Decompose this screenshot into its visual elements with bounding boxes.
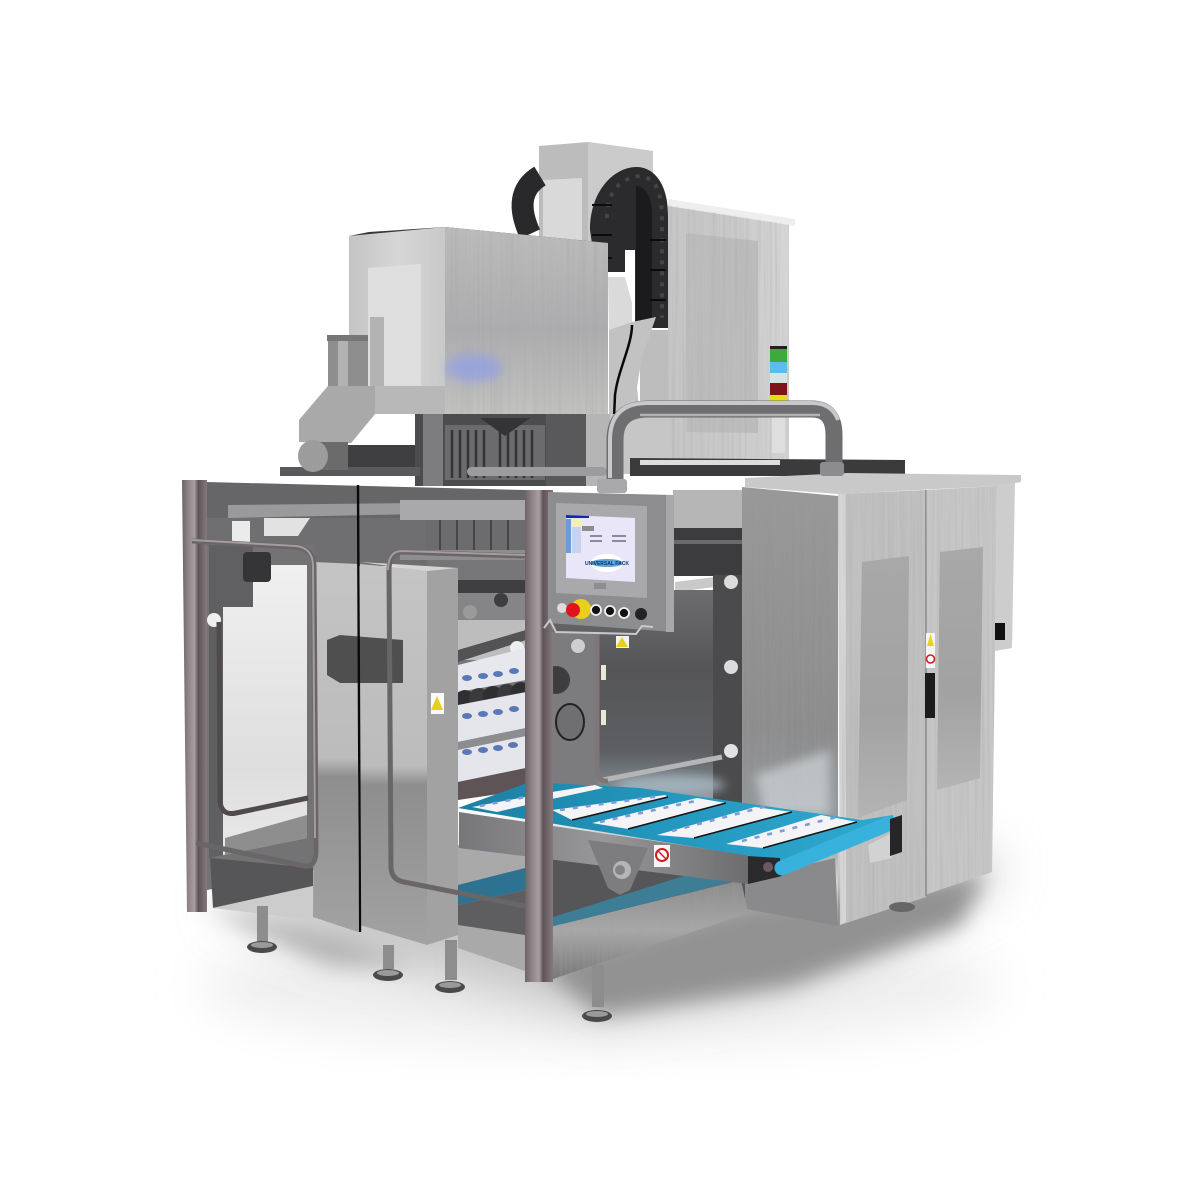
end roller <box>748 824 888 884</box>
maker badge <box>594 583 606 589</box>
right cabinet <box>838 486 1005 925</box>
gusset plate <box>588 840 648 895</box>
cabinet window 2 <box>937 547 983 790</box>
left glass door panel <box>207 545 315 890</box>
foot left <box>247 906 277 953</box>
bolt 3 <box>724 744 738 758</box>
cabinet window 1 <box>858 556 909 818</box>
belt <box>458 782 895 875</box>
lower left panel <box>210 858 313 920</box>
control panel <box>544 492 674 634</box>
under hopper dosing section <box>415 414 670 486</box>
panel warning sign <box>616 636 629 648</box>
horizontal rod <box>467 467 607 476</box>
conveyor frame <box>459 812 748 884</box>
side panel <box>742 487 838 926</box>
screen <box>566 515 635 582</box>
screen bezel <box>556 503 647 598</box>
button 4 <box>635 608 647 620</box>
foot front <box>582 965 612 1022</box>
foot right <box>435 940 465 993</box>
door latch <box>925 673 935 718</box>
foot rear <box>889 902 915 912</box>
front cable chain <box>590 167 668 328</box>
knob <box>207 613 221 627</box>
selector knob <box>571 639 585 653</box>
roller ring 1 <box>542 666 570 694</box>
foot middle <box>373 945 403 981</box>
handrail bases <box>597 462 844 493</box>
conveyor <box>458 782 895 884</box>
blue reflection <box>446 354 502 382</box>
button 2 <box>605 606 615 616</box>
selector switch <box>557 603 567 613</box>
usb port <box>995 623 1005 640</box>
bolt 1 <box>724 575 738 589</box>
product strips <box>472 785 857 848</box>
under conveyor interior <box>553 850 745 925</box>
warning label <box>431 693 444 714</box>
vertical tube <box>597 632 608 781</box>
front post <box>525 490 553 982</box>
pouch row 2 <box>458 692 526 742</box>
hopper box <box>299 227 608 443</box>
panel grab handle <box>544 620 653 634</box>
left door handrail <box>192 540 316 866</box>
pouch row 1 <box>458 648 526 692</box>
button 1 <box>591 605 601 615</box>
hopper window <box>368 264 421 386</box>
deck slot <box>630 458 905 476</box>
stack light <box>770 346 787 473</box>
rear cable chain <box>523 176 540 234</box>
servo motor <box>243 552 271 582</box>
upper frame <box>207 482 525 580</box>
split line <box>358 485 360 932</box>
bolt 2 <box>724 660 738 674</box>
hopper plate <box>370 317 384 386</box>
no step sign <box>654 845 670 867</box>
door handle <box>327 635 403 683</box>
connector housing and black cable <box>608 277 656 418</box>
inner chamber <box>542 575 742 815</box>
carriage roller <box>280 440 420 476</box>
roller row <box>455 682 531 710</box>
deck top <box>745 473 1021 494</box>
small labels <box>601 665 606 680</box>
funnel <box>299 386 445 443</box>
conveyor end bracket <box>868 815 902 863</box>
button 3 <box>619 608 629 618</box>
pouch column area <box>455 560 531 800</box>
no entry sign <box>926 650 935 668</box>
upper back section <box>673 490 742 592</box>
floor shadow <box>200 800 1000 1045</box>
pouch row 3 <box>458 736 526 782</box>
rear control cabinet <box>640 199 795 470</box>
warning sign <box>926 633 935 650</box>
return rod <box>603 757 722 780</box>
screen logo: UNIVERSAL PACK <box>585 561 629 567</box>
left post <box>182 480 207 912</box>
emergency stop <box>566 599 591 619</box>
rear tower <box>539 142 653 245</box>
top handrail <box>610 403 838 482</box>
right cabinet side <box>995 483 1015 651</box>
lower inner section <box>458 845 525 971</box>
roller ring 2 <box>556 704 584 740</box>
inner tube left door <box>219 622 308 814</box>
center door panels <box>313 485 458 945</box>
center door handrail <box>388 551 525 906</box>
lower side block <box>741 858 838 926</box>
feed can <box>327 335 368 387</box>
base beam <box>550 865 748 980</box>
